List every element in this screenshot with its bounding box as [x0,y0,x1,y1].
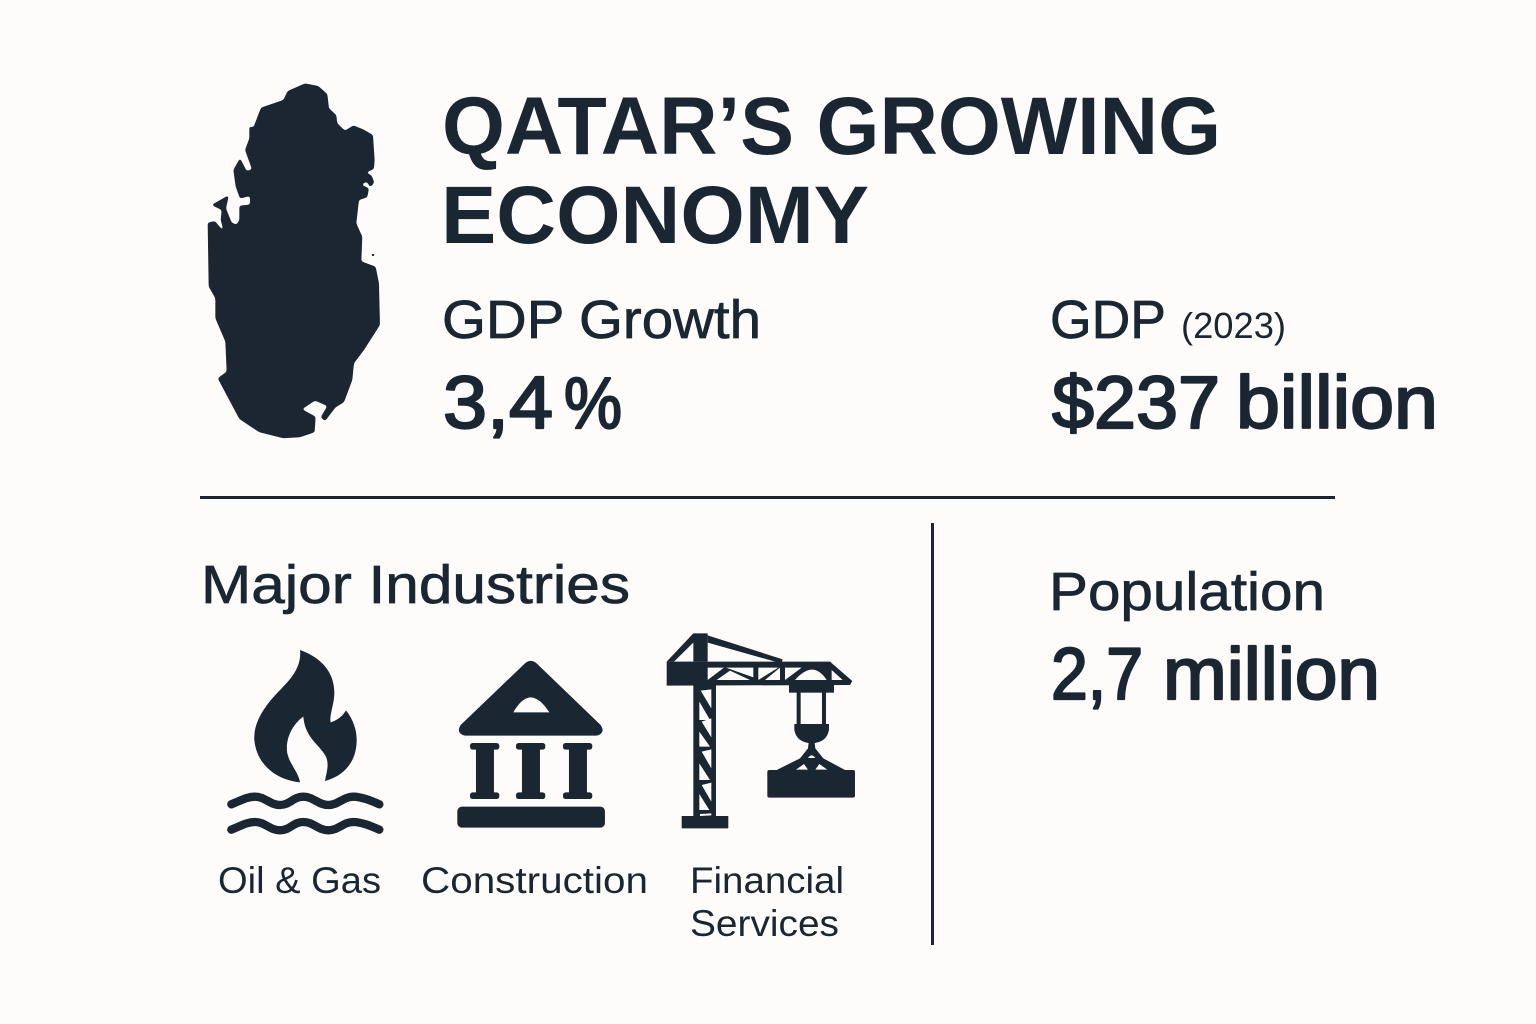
labels: industries: Oil & Gas [218,860,381,901]
labels: industries: Construction [421,860,648,901]
icon: construction crane [667,633,855,828]
stat: population [1049,562,1380,715]
stat: GDP 2023: billion [1236,361,1438,444]
stat: GDP 2023: $237 [1052,361,1220,444]
heading: major industries: Major Industries [201,555,630,615]
labels: industries [218,860,844,944]
icon: flame over water [231,650,379,830]
stat: GDP 2023: (2023) [1181,305,1286,346]
stat: population: Population [1049,562,1325,622]
labels: industries: Services [690,903,839,944]
stat: GDP growth: % [564,364,622,444]
stat: population: 2,7 [1051,634,1143,715]
stat: GDP 2023 [1050,290,1438,444]
labels: industries: Financial [690,860,844,901]
icon: bank building [457,661,605,828]
title: ECONOMY [441,170,869,261]
title: QATAR’S GROWING [442,81,1221,172]
stat: GDP growth: 3,4 [443,361,553,444]
title [441,81,1221,261]
stat: GDP 2023: GDP [1050,290,1166,350]
stat: population: million [1163,634,1380,715]
stat: GDP growth [442,290,761,444]
stat: GDP growth: GDP Growth [442,290,761,350]
icon: map of Qatar [208,83,380,438]
